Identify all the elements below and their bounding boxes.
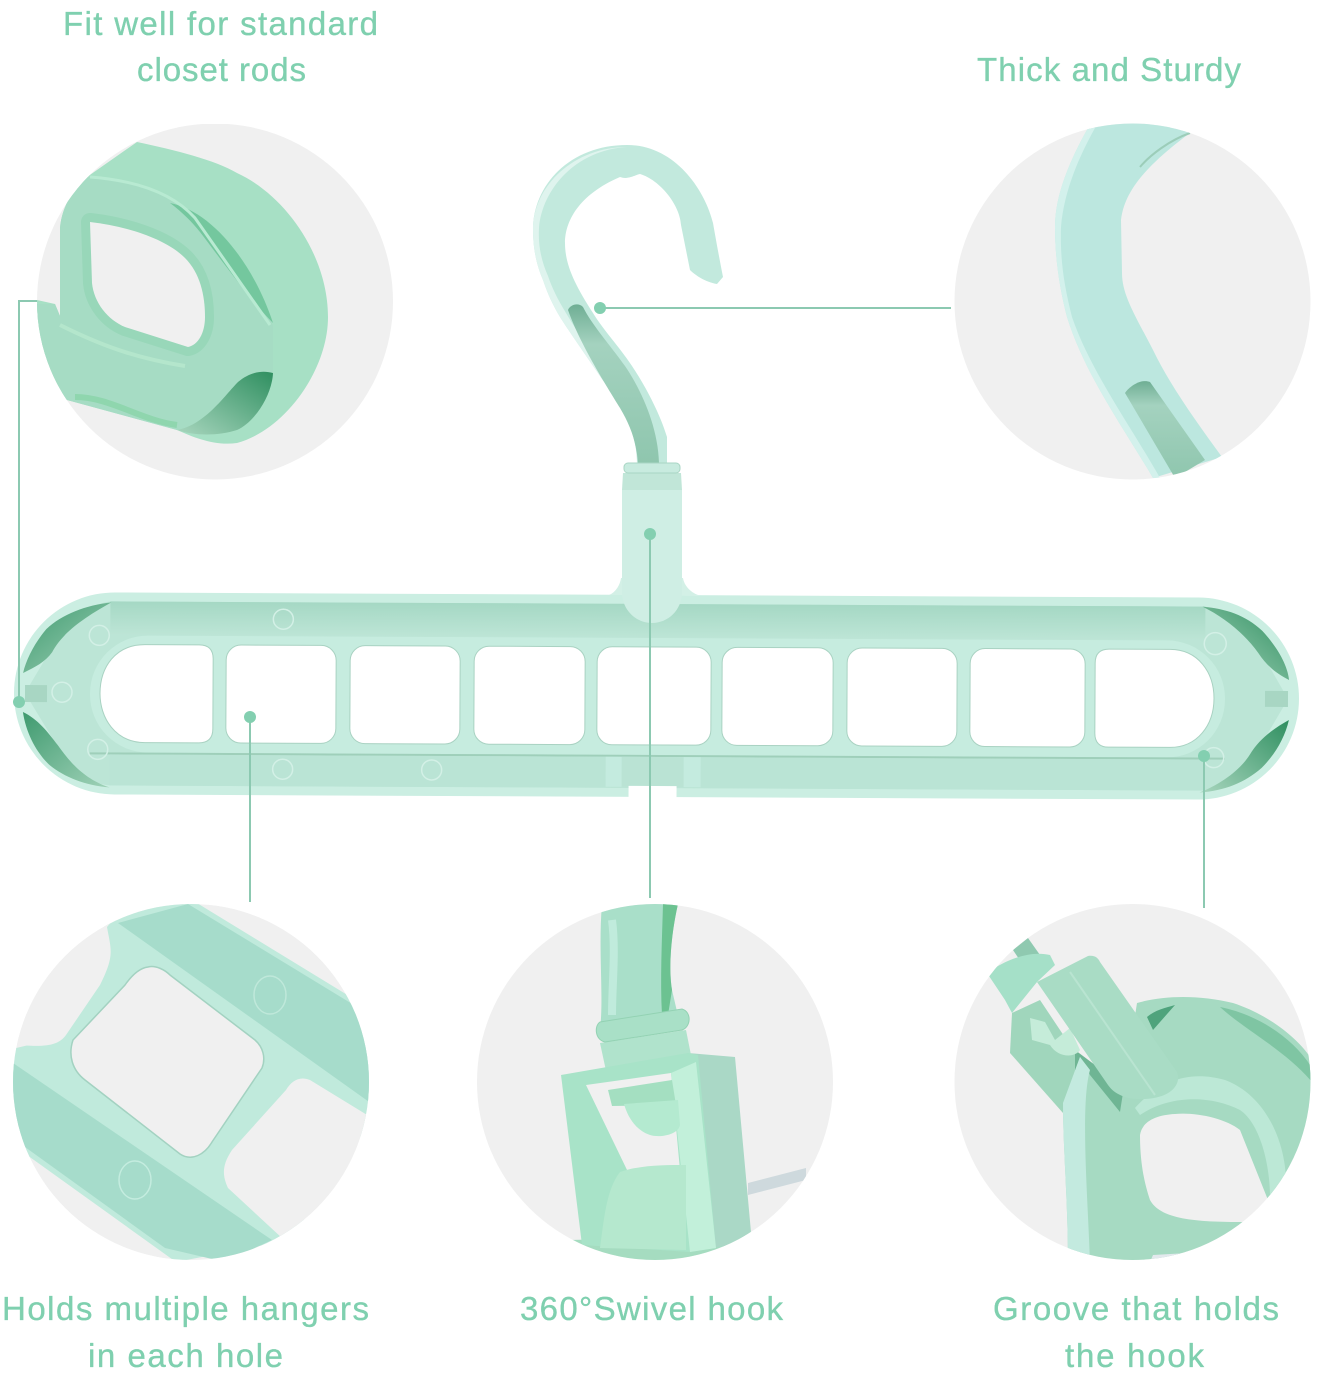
panel: groove detail circle	[954, 904, 1312, 1262]
title: groove caption: Groove that holds	[993, 1290, 1279, 1327]
body	[1063, 997, 1312, 1262]
title: closet rods caption: Fit well for standard	[63, 5, 378, 42]
frame	[1010, 1000, 1080, 1113]
body	[14, 592, 1299, 803]
swivel ring	[987, 954, 1055, 1013]
panel: end detail circle	[37, 124, 393, 480]
end channels	[25, 685, 47, 702]
callout lines and dots	[13, 301, 1210, 908]
hook arm	[600, 904, 679, 1030]
ejector marks	[52, 608, 1226, 784]
title: holds multiple hangers caption	[2, 1290, 369, 1374]
panel: multi-hole detail circle	[5, 880, 372, 1262]
roller	[600, 1165, 686, 1250]
panel: swivel hook detail circle	[477, 904, 833, 1262]
swivel ring	[596, 1009, 689, 1042]
title: holds multiple hangers caption: Holds multiple hangers	[2, 1290, 369, 1327]
title: groove caption	[993, 1290, 1279, 1374]
notch recess	[606, 757, 701, 787]
gap fill	[1075, 1052, 1122, 1112]
crescent	[1220, 1007, 1312, 1082]
title: closet rods caption: closet rods	[137, 51, 306, 88]
swivel cap	[609, 463, 698, 623]
end crescents	[23, 602, 111, 673]
holes	[100, 644, 213, 743]
base	[573, 1236, 745, 1260]
knobs	[1030, 1018, 1080, 1055]
title: swivel hook caption: 360°Swivel hook	[520, 1290, 784, 1327]
title: groove caption: the hook	[1065, 1337, 1204, 1374]
inner ring band	[1135, 1076, 1286, 1196]
panel: thick and sturdy detail circle	[954, 120, 1312, 481]
arm highlight	[1063, 1057, 1090, 1262]
bottom shadow	[1151, 1254, 1179, 1259]
title: thick and sturdy caption: Thick and Sturdy	[977, 51, 1242, 88]
frame side	[688, 1053, 752, 1250]
frame	[561, 1053, 716, 1252]
title: closet rods caption	[63, 5, 378, 88]
frame opening	[586, 1073, 680, 1172]
cap	[1037, 956, 1178, 1099]
title: holds multiple hangers caption: in each hole	[88, 1337, 283, 1374]
silver rod	[748, 1168, 806, 1195]
hanger illustration	[14, 145, 1299, 803]
neck	[600, 1030, 690, 1068]
stem	[1013, 938, 1040, 958]
bullet knob	[608, 1080, 676, 1106]
hook	[533, 145, 723, 465]
